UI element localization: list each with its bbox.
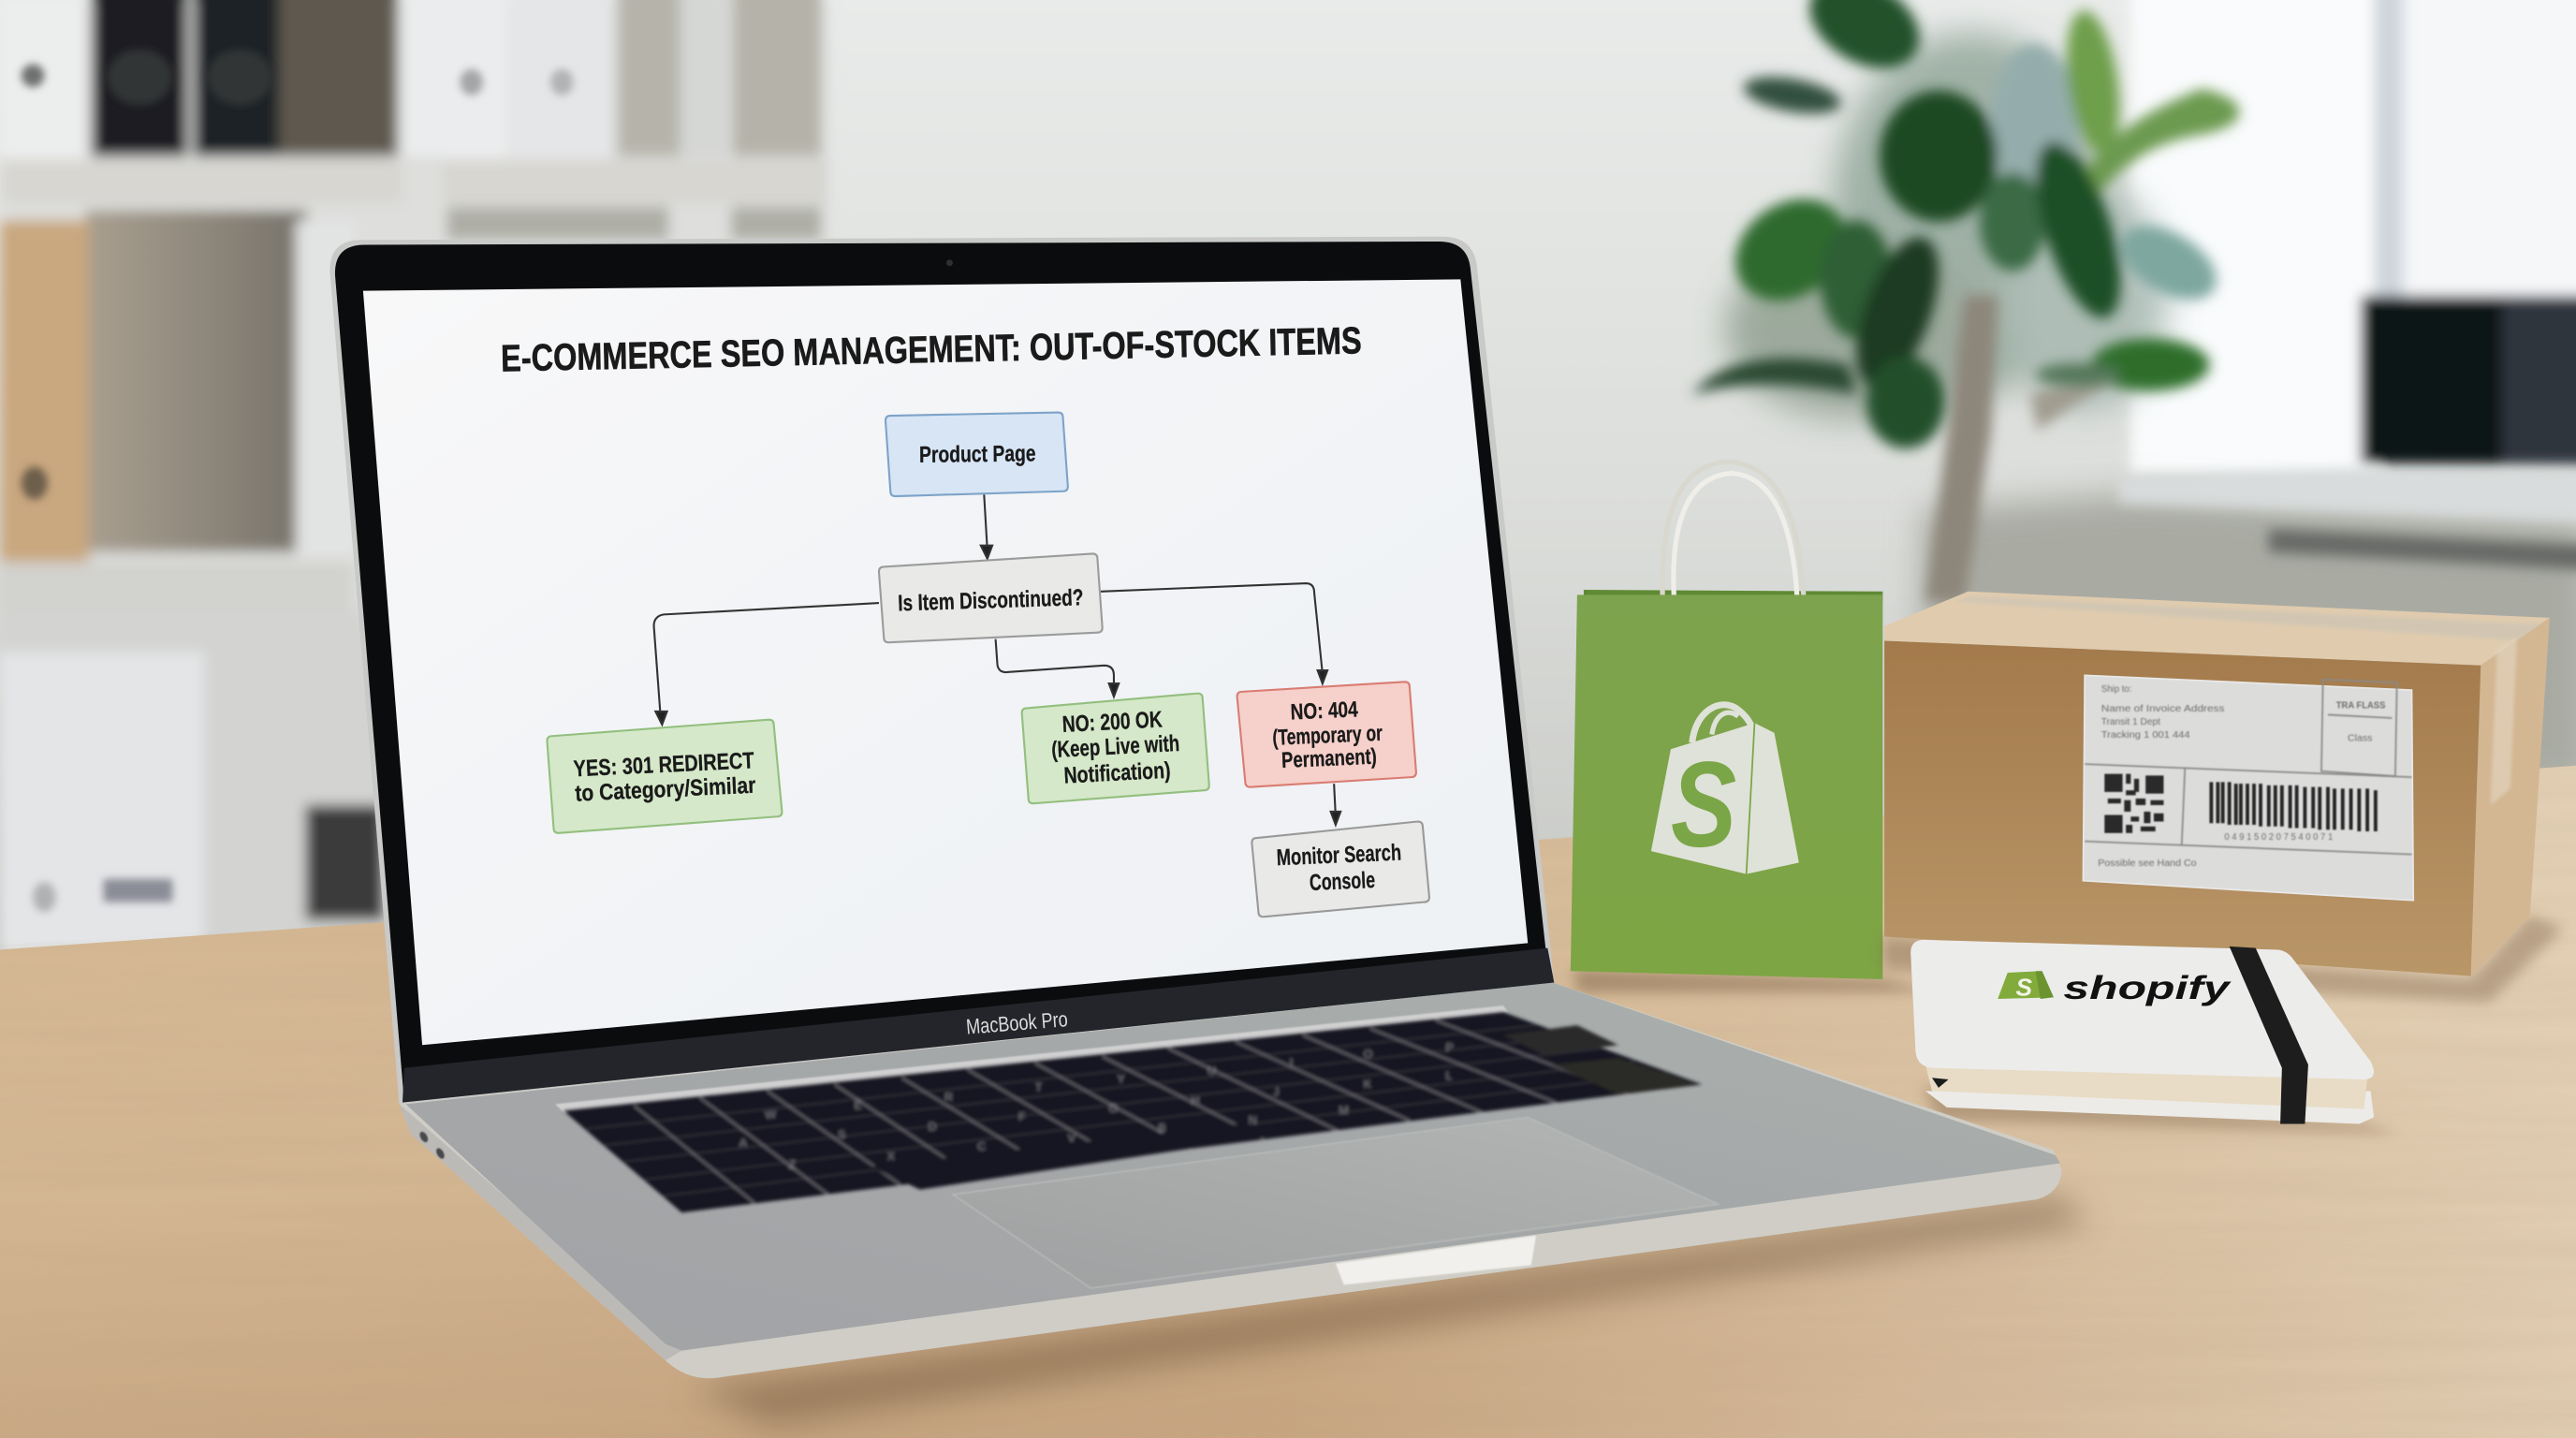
key letters: A (739, 1137, 748, 1150)
label address text: Name of Invoice Address (2101, 704, 2225, 714)
key letters: Z (788, 1158, 796, 1171)
box: is item discontinued: Is Item Discontinued? (898, 585, 1084, 616)
key letters: I (1290, 1056, 1293, 1069)
box: monitor search console: Console (1309, 868, 1376, 896)
screen (363, 279, 1528, 1045)
label address text: Tracking 1 001 444 (2101, 730, 2190, 741)
key letters: N (1249, 1113, 1257, 1126)
box: is item discontinued (879, 553, 1103, 642)
logo: shopify (1998, 970, 2232, 1006)
key letters: E (855, 1099, 862, 1112)
arrow: product page to question (981, 494, 992, 559)
key letters: B (1158, 1122, 1166, 1135)
notebook cover (1910, 940, 2374, 1079)
icon: white shopping bag logo (1651, 705, 1799, 874)
arrow: question to 404 (1101, 583, 1327, 683)
box front (1884, 640, 2481, 976)
shipping label (2083, 675, 2413, 901)
label address text: Ship to: (2101, 684, 2131, 695)
camera (946, 259, 953, 266)
bag handles (1662, 462, 1804, 601)
box: product page (886, 413, 1068, 496)
label address text: Class (2348, 734, 2373, 744)
spacebar (871, 1123, 1331, 1190)
notebook pages (1925, 1064, 2367, 1109)
box tape (1955, 596, 2543, 640)
box shadow (1882, 916, 2563, 1003)
wall right of shelf (831, 0, 2145, 1003)
arrow: question to yes (654, 603, 879, 725)
hinge strip (402, 948, 1554, 1103)
keyboard well highlight (555, 1005, 1508, 1114)
bag rim (1584, 590, 1882, 601)
key letters: M (1339, 1104, 1349, 1117)
flowchart on screen (501, 318, 1429, 917)
key letters: X (887, 1150, 895, 1163)
key letters: J (1273, 1086, 1279, 1099)
trackpad (953, 1117, 1719, 1288)
left side edge (399, 1104, 681, 1360)
plant trunk (1925, 296, 2110, 601)
key letters: S (838, 1128, 845, 1141)
screen title: E-COMMERCE SEO MANAGEMENT: OUT-OF-STOCK ITEMS (501, 318, 1362, 380)
key letters: P (1445, 1041, 1454, 1054)
key letters: O (1364, 1048, 1372, 1061)
left side ports (418, 1130, 446, 1160)
box: product page: Product Page (919, 441, 1036, 468)
notebook shadow (1922, 1088, 2398, 1134)
box top (1884, 592, 2550, 666)
icon: white shopping bag logo: S (1671, 736, 1736, 873)
lid silver edge (329, 237, 1554, 1104)
box side (2471, 618, 2550, 976)
bookshelf with binders (0, 0, 838, 986)
box: yes 301 redirect (547, 720, 782, 833)
barcode (2211, 782, 2376, 831)
key letters (739, 1041, 1454, 1171)
logo: shopify: shopify (2063, 970, 2232, 1006)
box: no 404: Permanent) (1281, 745, 1377, 773)
box: no 200 ok (1022, 694, 1209, 803)
notebook (1910, 940, 2398, 1134)
label address text (2098, 684, 2386, 869)
window and sill (1922, 0, 2576, 788)
arrow: question to 200 ok (996, 639, 1119, 697)
box: no 200 ok: NO: 200 OK (1061, 707, 1164, 738)
laptop lid (329, 237, 1554, 1104)
laptop deck (406, 983, 2060, 1351)
key letters: C (977, 1140, 986, 1153)
label address text: 0 4 9 1 5 0 2 0 7 5 4 0 0 7 1 (2224, 832, 2333, 843)
QR code (2104, 774, 2163, 833)
label address text: Possible see Hand Co (2098, 858, 2197, 869)
logo: shopify: S (2016, 974, 2033, 1002)
shadow under laptop (690, 1196, 2086, 1426)
right-hand keys (1553, 1058, 1699, 1094)
arrow: 404 to monitor (1331, 784, 1340, 825)
box: no 404 (1237, 682, 1416, 787)
cardboard box (1882, 592, 2563, 1003)
front notch (1336, 1236, 1536, 1284)
key letters: U (1208, 1064, 1216, 1078)
box: no 200 ok: Notification) (1063, 758, 1171, 789)
key letters: T (1035, 1080, 1043, 1093)
bag shadow (1573, 969, 1939, 992)
bag body (1571, 594, 1882, 979)
plant leaves (1692, 0, 2240, 448)
elastic band (2230, 946, 2308, 1123)
box: monitor search console (1251, 822, 1429, 917)
label address text: TRA FLASS (2336, 700, 2386, 711)
lid bezel (335, 242, 1549, 1101)
box: monitor search console: Monitor Search (1276, 840, 1402, 871)
macbook label: MacBook Pro (965, 1006, 1069, 1039)
key letters: V (1068, 1132, 1076, 1145)
key letters: D (929, 1120, 937, 1133)
keyboard (564, 1012, 1702, 1212)
key letters: G (1109, 1102, 1118, 1115)
key letters: R (944, 1091, 953, 1104)
plant haze (1725, 33, 2169, 419)
plant (1692, 0, 2240, 601)
wall (0, 0, 2576, 986)
key letters: L (1445, 1069, 1452, 1082)
box: no 200 ok: (Keep Live with (1051, 731, 1180, 763)
key letters: F (1018, 1110, 1026, 1123)
box: yes 301 redirect: to Category/Similar (575, 773, 756, 807)
notebook bottom cover (1925, 1091, 2374, 1123)
laptop (329, 237, 2062, 1378)
box: yes 301 redirect: YES: 301 REDIRECT (573, 748, 754, 782)
background: blurred office wall, shelves, plant and window (0, 0, 2576, 1003)
key letters: K (1364, 1078, 1372, 1091)
shopping bag (1571, 462, 1939, 992)
box side tape (2491, 638, 2517, 805)
laptop base: left side and front edge (399, 983, 2062, 1378)
desk (0, 723, 2576, 1438)
binder label dots (22, 50, 574, 912)
key letters: W (765, 1108, 777, 1122)
label address text: Transit 1 Dept (2101, 717, 2160, 727)
box: no 404: NO: 404 (1290, 697, 1359, 726)
key letters: H (1191, 1093, 1199, 1107)
box: no 404: (Temporary or (1272, 722, 1383, 751)
key letters: Y (1117, 1073, 1125, 1086)
